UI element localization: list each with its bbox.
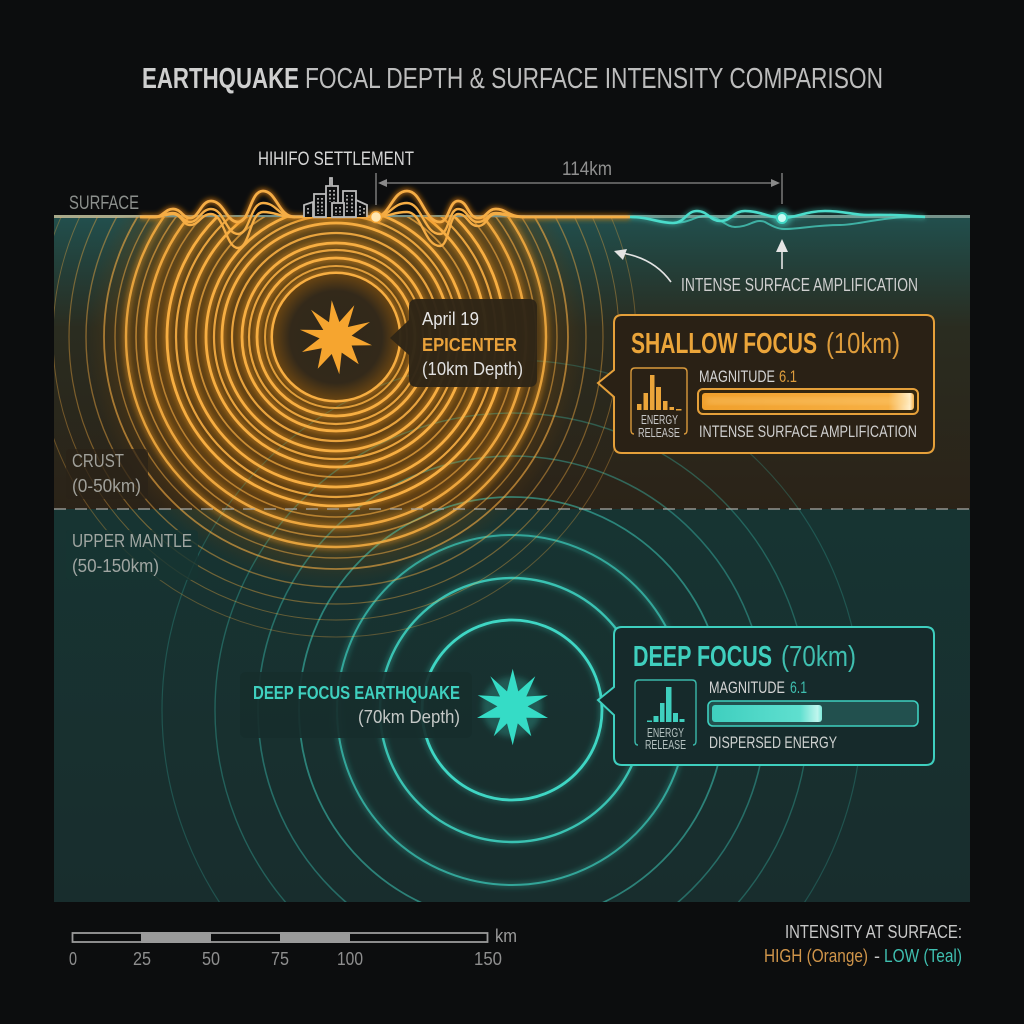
distance dimension: 114km [376, 159, 782, 205]
icon: city buildings [304, 178, 367, 217]
orange surface dot [367, 208, 385, 226]
crust label: (0-50km) [72, 476, 141, 496]
amplification annotation: INTENSE SURFACE AMPLIFICATION [681, 274, 918, 295]
deep focus label: (70km Depth) [358, 707, 460, 727]
scale bar [69, 926, 517, 969]
magnitude label shallow: 6.1 [779, 368, 797, 386]
icon: energy release deep: RELEASE [645, 738, 686, 752]
upper mantle label: UPPER MANTLE [72, 531, 192, 551]
arrow: up to teal dot [776, 239, 788, 269]
callout: epicenter: EPICENTER [422, 334, 517, 355]
crust label [66, 449, 148, 499]
callout: epicenter: (10km Depth) [422, 359, 523, 379]
epicenter star [273, 274, 399, 400]
intensity legend [764, 922, 962, 966]
intensity legend: LOW (Teal) [884, 946, 962, 966]
crust label: CRUST [72, 451, 124, 471]
scale bar: 0 [69, 949, 77, 969]
deep heading: DEEP FOCUS [633, 641, 772, 673]
settlement label: HIHIFO SETTLEMENT [258, 149, 414, 170]
title [142, 63, 883, 95]
shallow heading: SHALLOW FOCUS [631, 328, 817, 360]
title: FOCAL DEPTH & SURFACE INTENSITY COMPARISON [305, 63, 883, 95]
magnitude label deep: 6.1 [790, 679, 807, 697]
deep focus label: DEEP FOCUS EARTHQUAKE [253, 683, 460, 703]
upper mantle label: (50-150km) [72, 556, 159, 576]
deep caption: DISPERSED ENERGY [709, 733, 837, 752]
panel: deep focus [598, 627, 934, 765]
icon: energy release shallow: RELEASE [638, 426, 680, 440]
teal seismic rings [162, 360, 858, 902]
arrow: curved to rings [614, 249, 671, 282]
shallow heading: (10km) [826, 328, 900, 360]
scale bar: 25 [133, 949, 151, 969]
magnitude label shallow: MAGNITUDE [699, 368, 775, 386]
scale bar: 75 [271, 949, 289, 969]
orange glow [98, 217, 574, 578]
deep heading: (70km) [781, 641, 856, 673]
scale bar: 50 [202, 949, 220, 969]
layer boundary dashed line [54, 508, 970, 510]
magnitude bar shallow [698, 389, 918, 414]
scale bar: 150 [474, 949, 502, 969]
intensity legend: - [874, 946, 880, 966]
teal surface dot [773, 209, 791, 227]
intensity legend: HIGH (Orange) [764, 946, 868, 966]
scale bar: km [495, 926, 517, 946]
deep focus label [240, 672, 472, 738]
callout: epicenter: April 19 [422, 309, 479, 329]
orange seismic rings [54, 217, 636, 638]
shallow caption: INTENSE SURFACE AMPLIFICATION [699, 422, 917, 441]
icon: energy release shallow [631, 368, 687, 440]
scale bar: 100 [337, 949, 363, 969]
orange surface waves [140, 191, 630, 248]
panel: earth cross-section [54, 215, 970, 902]
magnitude bar deep [708, 701, 918, 726]
magnitude label deep: MAGNITUDE [709, 679, 785, 697]
upper mantle label [66, 530, 198, 580]
distance dimension: 114km: 114km [562, 159, 612, 180]
icon: energy release deep: ENERGY [647, 726, 684, 740]
panel: shallow focus [598, 315, 934, 453]
icon: energy release shallow: ENERGY [641, 413, 678, 427]
title: EARTHQUAKE [142, 63, 299, 95]
teal surface waves [630, 211, 925, 229]
icon: energy release deep [635, 680, 696, 752]
callout: epicenter [390, 299, 537, 387]
surface label: SURFACE [69, 193, 139, 214]
intensity legend: INTENSITY AT SURFACE: [785, 922, 962, 942]
deep focus star [477, 669, 548, 745]
